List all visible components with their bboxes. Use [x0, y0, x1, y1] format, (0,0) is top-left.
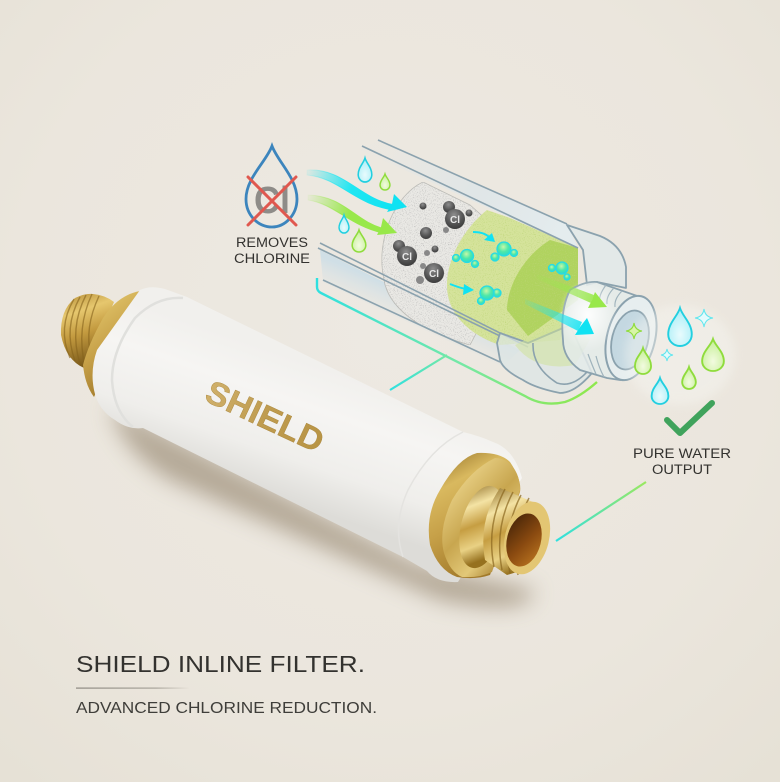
- flow arrow in cyan: [307, 170, 407, 212]
- product: filter cartridge: [61, 287, 557, 607]
- cutaway diagram: [307, 140, 665, 404]
- end cap upper wall: [567, 225, 626, 288]
- right brass fitting: [429, 453, 557, 579]
- white carbon layer: [382, 182, 520, 345]
- pure water output callout: [556, 305, 735, 541]
- brand name: SHIELD: [200, 373, 330, 460]
- title block: [76, 651, 377, 717]
- tube wall bottom: [320, 250, 520, 367]
- subtitle: ADVANCED CHLORINE REDUCTION.: [76, 700, 377, 717]
- icon: check mark: [667, 403, 712, 433]
- label: removes chlorine: REMOVES: [236, 235, 308, 250]
- light green layer: [447, 210, 578, 345]
- label: pure water output: OUTPUT: [652, 462, 712, 477]
- chlorine particles: Cl: [402, 252, 412, 263]
- bracket leader line: [390, 355, 447, 390]
- dark green layer: [507, 240, 578, 336]
- chlorine particles: Cl: [450, 215, 460, 226]
- sparkles: [626, 309, 713, 361]
- flow arrow in green: [308, 195, 397, 235]
- end cap lower wall: [497, 320, 592, 393]
- removes chlorine callout: [234, 146, 310, 266]
- output water drops: [635, 308, 724, 404]
- clean water molecules: [452, 242, 570, 304]
- white filter body: [93, 287, 522, 582]
- title: SHIELD INLINE FILTER.: [76, 651, 365, 677]
- bracket line: [317, 278, 597, 404]
- outlet arrow green: [537, 274, 607, 308]
- left brass fitting: [61, 291, 140, 397]
- label: pure water output: PURE WATER: [633, 446, 731, 461]
- chlorine particles: Cl: [429, 269, 439, 280]
- product shadow: [110, 405, 535, 607]
- chlorine particles: [393, 201, 472, 284]
- incoming water drops: [339, 158, 390, 252]
- tube wall top: [360, 140, 578, 248]
- small flow arrows: [450, 232, 495, 295]
- output leader line: [556, 482, 646, 541]
- label: removes chlorine: CHLORINE: [234, 251, 310, 266]
- soft glow behind drops: [625, 305, 735, 405]
- outlet nipple: [558, 279, 665, 386]
- tube outline lines: [318, 140, 578, 362]
- outlet arrow cyan: [525, 299, 594, 335]
- icon: crossed-out chlorine drop: Cl: [254, 180, 290, 222]
